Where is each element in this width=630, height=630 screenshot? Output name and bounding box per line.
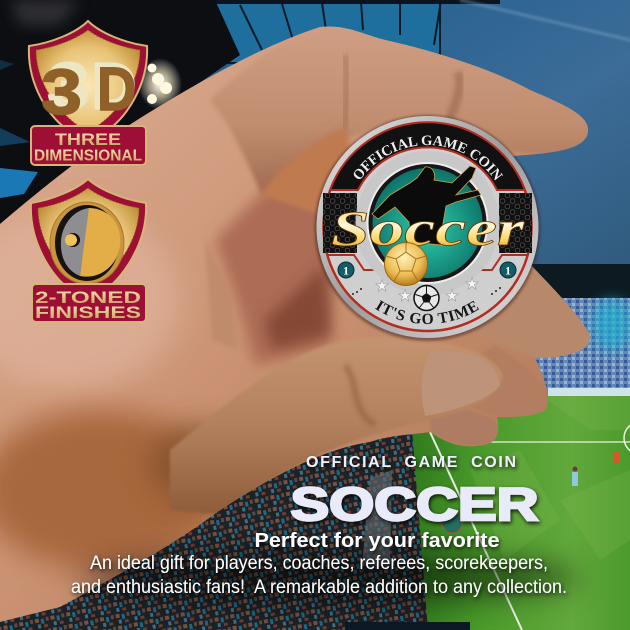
hex panels	[323, 193, 357, 253]
pitch	[400, 393, 630, 630]
top band	[330, 122, 525, 190]
sky and roof	[190, 0, 630, 280]
top text: OFFICIAL GAME COIN	[354, 136, 504, 180]
3D icon	[41, 50, 136, 128]
little finger	[430, 410, 500, 446]
3D icon: D	[97, 56, 136, 124]
stars: ★	[465, 274, 479, 293]
red trim	[328, 255, 527, 270]
shield	[31, 179, 146, 290]
palm hollow	[212, 190, 336, 368]
blue slats left	[0, 60, 38, 198]
coin	[313, 114, 542, 342]
stars: ★	[375, 276, 389, 295]
stars	[375, 274, 479, 305]
badge: three dimensional: DIMENSIONAL	[34, 148, 142, 164]
number badges: 1	[505, 264, 511, 278]
description line two: and enthusiastic fans! A remarkable addition to any collection.	[71, 577, 567, 598]
middle finger	[515, 274, 590, 358]
centre medallion	[356, 151, 500, 295]
shield	[29, 21, 147, 132]
label	[31, 126, 146, 165]
thumbnail	[422, 351, 500, 416]
stars: ★	[445, 286, 459, 305]
dots	[352, 287, 501, 295]
players	[572, 451, 619, 486]
distant stands	[525, 264, 630, 300]
number badges: 1	[343, 264, 349, 278]
description line one: An ideal gift for players, coaches, referees, scorekeepers,	[90, 553, 548, 574]
crowd stands	[0, 425, 428, 630]
coin icon	[50, 202, 124, 284]
product text block	[71, 454, 567, 598]
ring finger	[478, 346, 548, 417]
player silhouette	[372, 166, 481, 245]
thumb	[170, 337, 503, 515]
badge: 2-toned finishes: FINISHES	[35, 303, 141, 322]
stars: ★	[398, 286, 412, 305]
badge: three dimensional: THREE	[55, 130, 121, 149]
3D icon: D	[92, 51, 136, 122]
floodlights	[138, 58, 182, 110]
badge: three dimensional	[29, 21, 147, 165]
3D icon: 3	[41, 56, 82, 128]
3D icon: 3	[48, 50, 89, 122]
number badges	[338, 262, 516, 278]
roof panels	[205, 0, 441, 63]
label	[32, 284, 146, 322]
badge: 2-toned finishes: 2-TONED	[35, 288, 141, 307]
kicker: OFFICIAL GAME COIN	[306, 454, 516, 471]
badge: 2-toned finishes	[31, 179, 146, 322]
pitch lines	[430, 422, 630, 630]
index finger	[210, 24, 600, 195]
back of hand shading	[0, 210, 180, 390]
main title: SOCCER	[290, 478, 538, 530]
text shadow backdrop	[80, 554, 580, 602]
small soccer ball	[414, 286, 439, 310]
subtitle: Perfect for your favorite	[254, 529, 500, 552]
Soccer script: Soccer	[331, 200, 525, 256]
dark upper left roof	[0, 0, 240, 230]
bottom text: IT'S GO TIME	[375, 300, 479, 324]
gold ball	[384, 242, 428, 286]
